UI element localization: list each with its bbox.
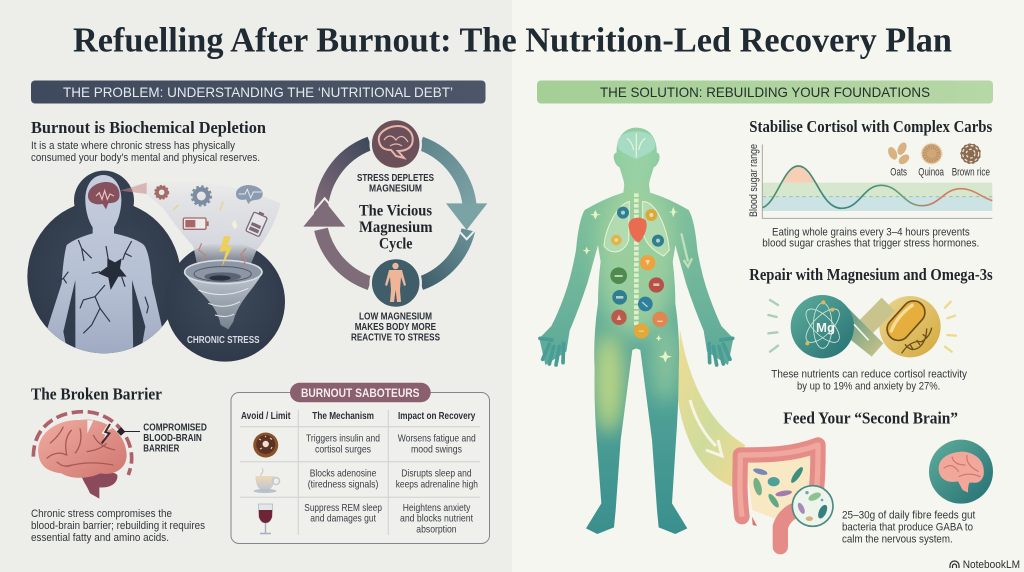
heading: feed your second brain: Feed Your “Second Brain” [783,409,958,428]
axes [762,144,992,218]
text: cycle name: Magnesium [359,219,433,236]
heading: burnout is biochemical depletion: Burnout is Biochemical Depletion [31,118,267,137]
icon: coffee cup [254,468,280,493]
text block: fibre: calm the nervous system. [842,533,953,545]
grain labels: Oats [890,167,907,179]
low band [762,197,992,211]
row 2 text: Blocks adenosine [310,468,377,480]
magnifier [792,486,833,526]
watermark: notebooklm: NotebookLM [963,559,1020,571]
row 3 text: absorption [416,523,457,535]
row 3 text: and blocks nutrient [400,513,473,525]
bottom circle: person icon [371,258,421,308]
intestine highlight [740,445,818,517]
banner: the solution [537,80,993,104]
circle glyph marks [615,211,663,332]
gold loop [879,296,941,357]
panel: the problem [27,80,489,544]
brain body [38,420,127,478]
small sparks [199,243,246,267]
label: chronic stress: CHRONIC STRESS [187,335,260,346]
cerebellum and stem [82,472,117,499]
row 2 text: Disrupts sleep and [401,468,472,480]
spike highlight [782,166,815,183]
row 2 text: keeps adrenaline high [396,478,478,490]
gut scalloped edge [740,445,818,517]
text: cycle name: The Vicious [359,202,432,220]
illustration: cracked body and stress vortex [27,171,285,370]
banner: the solution: THE SOLUTION: REBUILDING YOUR FOUNDATIONS [600,84,930,100]
text: low magnesium reactive [351,312,440,343]
crossing white edge [854,324,869,340]
grain labels [890,167,990,179]
table header [241,411,476,422]
table pill heading: BURNOUT SABOTEURS [301,386,420,400]
text: stress depletes magnesium: MAGNESIUM [369,184,422,195]
heading: the broken barrier: The Broken Barrier [31,384,162,403]
body silhouette [539,128,733,534]
teal loop [791,295,854,358]
text block: whole grains: Eating whole grains every 3–4 hours prevents [772,226,970,238]
atom electrons [805,300,834,345]
large intestine [740,445,818,547]
teal tail [830,300,883,357]
chart: blood sugar curve [762,141,992,218]
heart [629,218,647,243]
panel: burnout saboteurs table [231,383,490,544]
atom [801,303,845,348]
text block: barrier description: essential fatty and amino acids. [31,532,169,544]
text: low magnesium reactive: LOW MAGNESIUM [359,312,432,323]
icon: donut [253,432,278,458]
row 1 text: Worsens fatigue and [398,433,476,445]
row 1 text: cortisol surges [315,443,371,455]
circle with brain [929,440,993,504]
text block: whole grains: blood sugar crashes that trigger stress hormones. [762,238,979,250]
callout: compromised barrier: BARRIER [143,444,180,454]
text: low magnesium reactive: MAKES BODY MORE [355,322,436,333]
text block: fibre: 25–30g of daily fibre feeds gut [842,509,975,521]
stream arrow [690,400,722,456]
grain: quinoa [921,143,942,164]
lightning bolt [219,236,233,267]
cycle arrows [303,143,487,283]
vortex funnel [184,260,263,329]
rays right [945,302,956,352]
illustration: gut with microbiome [740,440,993,547]
capsule [882,296,930,345]
text block: burnout description: consumed your body's mental and physical reserves. [31,152,260,164]
background: right half [512,0,1024,572]
brain in head [88,182,120,209]
table frame [231,392,490,544]
text: cycle name [359,202,433,252]
panel: the solution [537,80,993,547]
nutrient circles [610,207,668,339]
top circle: brain icon [371,119,421,169]
vortex dark circle [165,242,285,362]
red streak from brain [120,183,147,194]
row 1 text: mood swings [411,443,462,455]
dashed barrier ring [33,412,132,475]
text block: barrier description [31,508,205,544]
safe band [762,183,992,197]
table pill heading [290,383,431,402]
infinity: magnesium and omega-3 [768,295,956,358]
axis label: Blood sugar range [748,144,760,217]
grain: brown rice [960,143,981,164]
text block: nutrients: These nutrients can reduce cortisol reactivity [771,369,967,381]
table header: Impact on Recovery [398,411,476,422]
brain folds [47,427,115,467]
stream: nutrients flowing to gut [677,330,745,488]
text block: nutrients [771,369,967,393]
curve [762,166,992,208]
gut interior [745,450,814,520]
table header: Avoid / Limit [241,411,291,422]
target dashed line [762,195,992,198]
callout: compromised barrier: BLOOD-BRAIN [143,433,202,444]
row 2 text: (tiredness signals) [308,478,378,490]
gut tail [752,517,757,526]
rays left [768,300,778,352]
banner: the problem [31,80,486,104]
human body figure [539,128,733,534]
crack [87,420,112,444]
text: stress depletes magnesium: STRESS DEPLETES [357,173,434,184]
text: low magnesium reactive: REACTIVE TO STRESS [351,332,440,343]
callout: compromised barrier: COMPROMISED [143,422,207,434]
text: cycle name: Cycle [379,235,412,252]
lungs [604,202,669,256]
light beam [132,181,281,270]
heading: stabilise cortisol: Stabilise Cortisol with Complex Carbs [749,117,993,136]
callout: compromised barrier [118,422,207,454]
text: stress depletes magnesium [357,173,434,195]
body light areas, clipped [594,130,679,433]
dna [902,328,932,353]
cracks [58,240,148,333]
text block: fibre [842,509,975,545]
icon: wine glass [258,504,272,534]
gears and broken icons [155,185,269,237]
banner: the problem: THE PROBLEM: UNDERSTANDING THE ‘NUTRITIONAL DEBT’ [63,84,453,100]
background: left half [0,0,512,572]
text block: fibre: bacteria that produce GABA to [842,521,973,533]
dark circles behind person [27,171,181,353]
row 1 text: Triggers insulin and [306,433,380,445]
gut bacteria [752,466,805,509]
row 2 text [308,468,478,490]
text block: nutrients: by up to 19% and anxiety by 27%. [797,381,940,393]
grain labels: Quinoa [918,167,945,179]
spine [629,193,643,327]
text block: burnout description [31,140,260,164]
row 3 text [304,502,473,535]
fingers [540,338,733,365]
sparkles [582,207,678,363]
central crack [98,258,127,290]
arm arrow [681,233,692,267]
row 3 text: Heightens anxiety [403,502,471,514]
diagram: vicious magnesium cycle [303,119,487,343]
row 1 text [306,433,476,455]
illustration: brain with compromised barrier [33,412,132,499]
row 3 text: and damages gut [310,513,376,525]
text block: barrier description: Chronic stress compromises the [31,508,172,520]
table header: The Mechanism [312,411,374,422]
table rules [240,410,480,535]
arm gaps [63,280,146,348]
label: mg: Mg [816,320,835,335]
text block: whole grains [762,226,979,250]
title: Refuelling After Burnout: The Nutrition-Led Recovery Plan [73,20,952,60]
text block: barrier description: blood-brain barrier; rebuilding it requires [31,520,205,532]
brain in head [617,131,655,159]
tan crossing band [857,298,895,337]
person silhouette [48,175,162,354]
grain labels: Brown rice [952,167,990,179]
text block: burnout description: It is a state where chronic stress has physically [31,140,235,152]
row 3 text: Suppress REM sleep [304,502,382,514]
person, clipped to circle [48,175,162,354]
grain: oats [886,141,911,166]
